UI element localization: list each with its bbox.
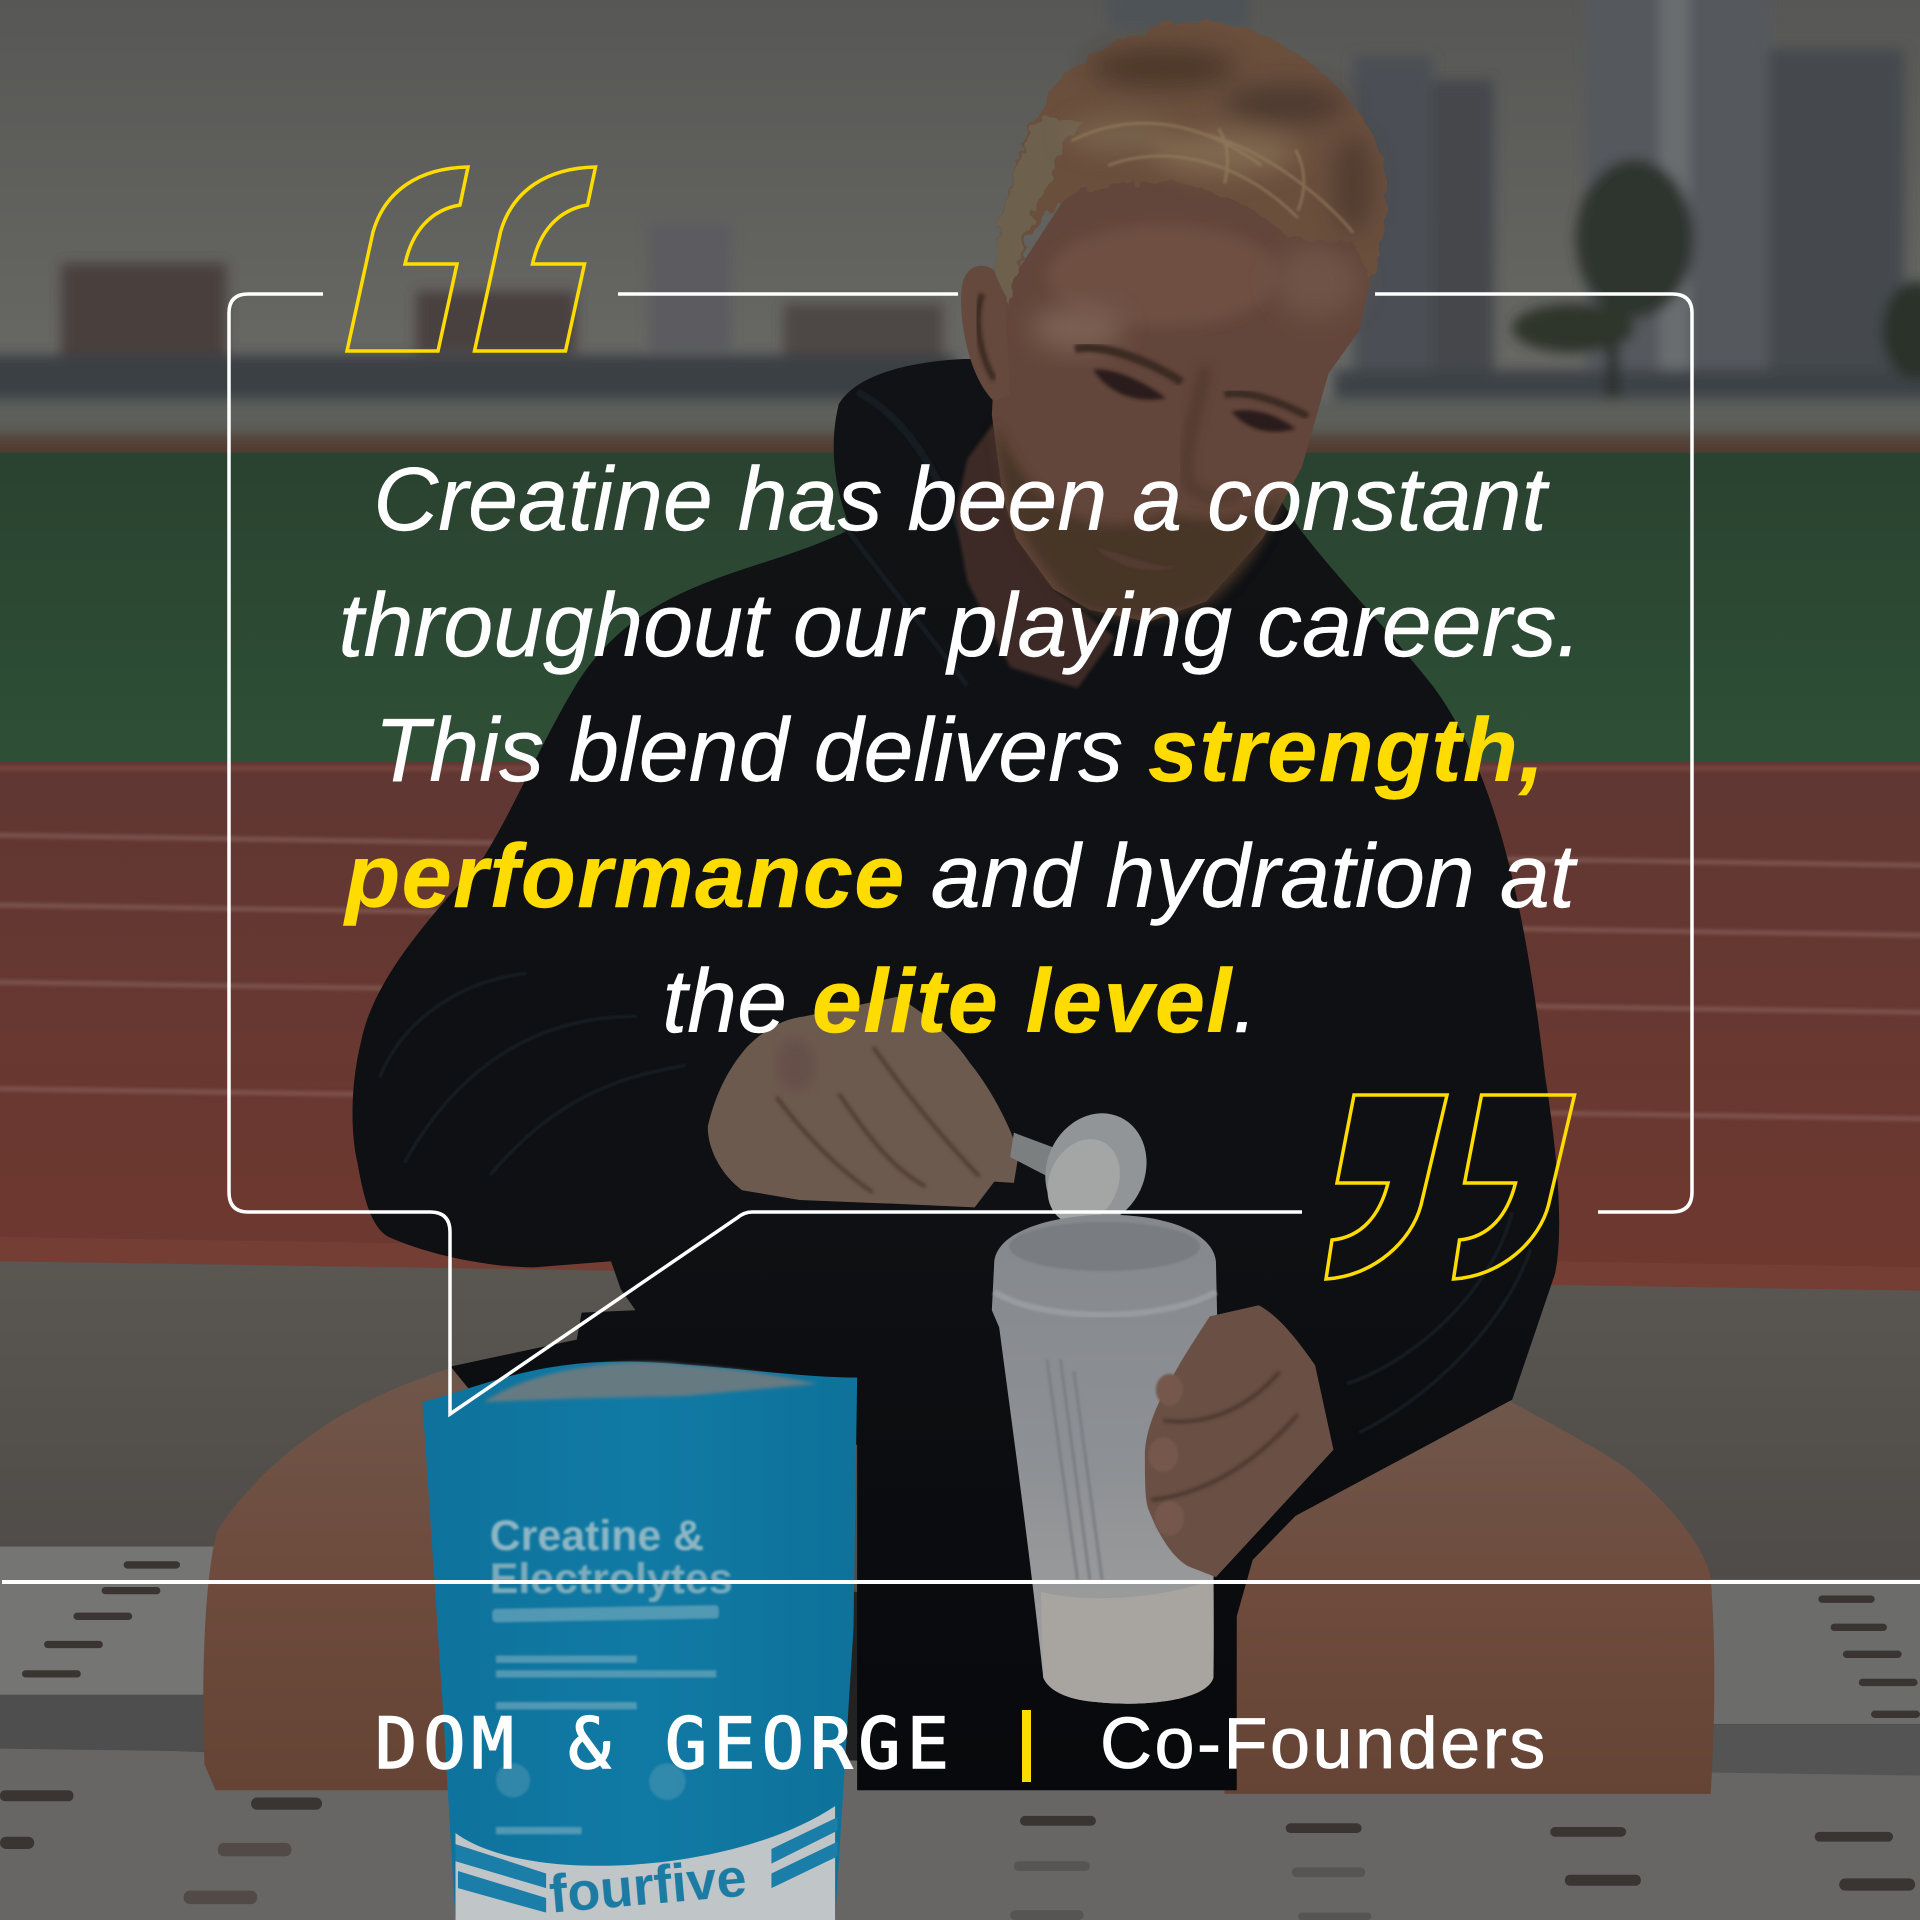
product pouch: Creatine & <box>490 1512 704 1560</box>
left and right thighs <box>203 1362 1714 1794</box>
quote text: Creatine has been a constant <box>373 450 1547 550</box>
yellow separator bar <box>1022 1710 1031 1782</box>
hand holding scoop <box>708 997 1165 1242</box>
man's dark hoodie and shorts <box>352 359 1559 1790</box>
quote text: performance and hydration at <box>345 826 1575 926</box>
quote text: This blend delivers strength, <box>374 701 1546 801</box>
bench <box>0 1547 1920 1920</box>
quote text: throughout our playing careers. <box>339 576 1581 676</box>
product pouch <box>422 1361 857 1920</box>
hand gripping shaker <box>1145 1305 1333 1577</box>
attribution role: Co-Founders <box>1100 1704 1548 1784</box>
horizontal divider <box>2 1580 1920 1584</box>
attribution name: DOM & GEORGE <box>375 1703 955 1785</box>
shaker bottle <box>992 1215 1217 1704</box>
product pouch: Electrolytes <box>490 1555 733 1603</box>
man's neck, ear, face, beard, hair <box>955 21 1386 688</box>
quote text: the elite level. <box>662 952 1258 1052</box>
quote text <box>339 450 1581 1052</box>
